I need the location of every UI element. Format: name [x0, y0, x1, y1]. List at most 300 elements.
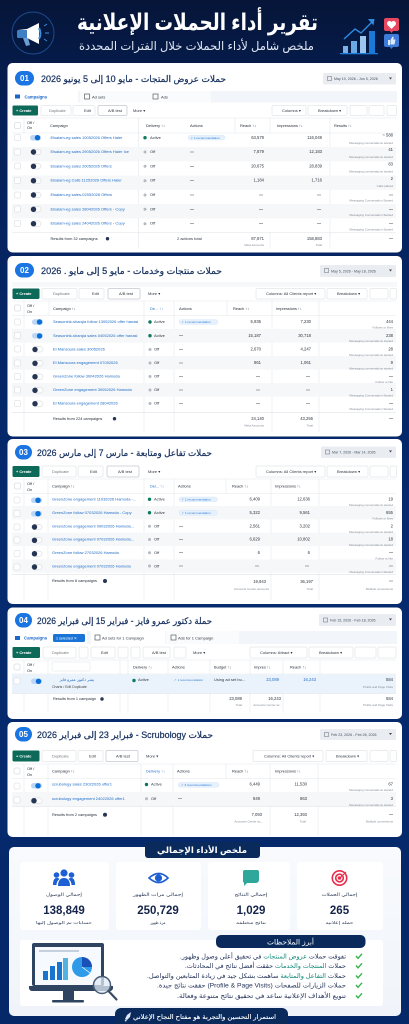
table header: Actions: [177, 768, 190, 774]
selected campaign row: 584: [386, 677, 394, 682]
date range picker: [321, 446, 396, 458]
toolbar labels: Breakdown ▾: [337, 469, 360, 474]
row 6: Messaging Conversation Started: [349, 570, 393, 574]
row 7: Messaging Conversation Started: [349, 228, 393, 232]
row 2: Elsalam-eg sales 29052026 Offers Haier Ice: [50, 149, 130, 154]
table header: Off /: [27, 303, 35, 308]
row 6: Off: [154, 387, 160, 392]
KPI card: total reach: حسابات تم الوصول إليها: [36, 920, 93, 926]
row 5: Messaging Conversation Started: [349, 198, 393, 202]
toolbar labels: More ▾: [148, 291, 160, 296]
panel: campaign 03 engagement and follow: [8, 439, 402, 604]
row 7: [14, 400, 393, 411]
totals row: Profile and Page Visits: [363, 703, 393, 707]
KPI card: total impressions: [116, 862, 201, 930]
section heading 02: حملات منتجات وخدمات - مايو 5 إلى مايو . 2026: [41, 266, 222, 277]
row 6: Messaging Conversation Started: [349, 394, 393, 398]
table header: On: [27, 309, 32, 314]
row 4: Off: [150, 178, 156, 183]
icon: megaphone: [12, 12, 54, 54]
row 7: Messaging Conversation Started: [349, 407, 393, 411]
totals row: Total: [316, 243, 322, 247]
row 4: Elsalam-eg Calls 11252026 Offers Haier: [50, 178, 122, 183]
KPI card: total reach: [20, 862, 109, 930]
totals row: Multiple conversions: [366, 820, 393, 824]
section heading 02: [15, 263, 222, 278]
totals row: Multiple conversions: [366, 587, 393, 591]
KPI card: total results: 1,029: [237, 905, 265, 917]
date range picker: May 5, 2026 - May 18, 2026: [331, 269, 376, 273]
row 5: Follow or like: [375, 556, 393, 560]
summary heading: ملخص الأداء الإجمالي: [157, 845, 247, 856]
row 1: Seasonink-sharqia follow 13052026 offer hanasi: [53, 319, 138, 324]
KPI card: total campaigns: 265: [330, 905, 350, 917]
row 3: El Mansoura sales 30052026: [53, 346, 106, 352]
row 3: Off: [150, 163, 156, 168]
row 1: 6,409: [250, 496, 261, 502]
table header: [12, 660, 396, 713]
row 2: ✓ 1 recommendation: [182, 511, 211, 515]
icon: like bubble: [384, 34, 399, 49]
tabs: Campaigns: [24, 94, 48, 100]
row 3: Messaging conversations started: [349, 353, 393, 357]
date range picker: Mar 7, 2026 - Mar 14, 2026: [332, 451, 376, 455]
row 1: 5,935: [251, 319, 262, 324]
row 1: ✓ 1 recommendation: [190, 136, 220, 140]
totals row: Meta Accounts: [244, 243, 264, 247]
row 4: 1,716: [312, 178, 323, 183]
row 7: Off: [150, 221, 156, 226]
row 6: Messaging Conversation Started: [349, 213, 393, 217]
table header: Impressions ↑↓: [277, 123, 303, 128]
row 3: [14, 346, 394, 357]
totals row: Results from 224 campaigns: [53, 416, 102, 421]
table header: Campaign ↑↓: [52, 768, 75, 774]
row 4: [14, 360, 394, 370]
row 3: 4,247: [301, 346, 312, 352]
subtitle: ملخص شامل لأداء الحملات خلال الفترات المحددة: [79, 38, 314, 54]
header banner: [12, 6, 399, 54]
row 3: [14, 162, 394, 173]
row 5: Off: [150, 192, 156, 197]
tabs: [12, 91, 397, 102]
table header: Results ↑↓: [334, 123, 352, 128]
row 4: Off: [154, 536, 160, 542]
row 2: 30,718: [298, 333, 312, 338]
section heading 05: حملات Scrubology - فبراير 23 إلى فبراير 2026: [37, 730, 213, 741]
toolbar labels: Columns ▾: [282, 108, 301, 113]
panel: campaign 04 doctor Amr Fayez: [8, 608, 402, 719]
tabs: 1 selected ✕: [56, 636, 77, 640]
toolbar labels: [16, 650, 342, 655]
icon: target: [332, 871, 347, 885]
row 7: El Mansoura engagement 28042026: [53, 400, 118, 406]
row 3: Messaging conversations started: [349, 530, 393, 534]
totals row: 24,140: [251, 416, 265, 421]
toolbar: [12, 106, 396, 116]
icon: eye: [149, 874, 168, 882]
panel: campaign 02 products and services: [8, 256, 402, 436]
row 4: Messaging conversations started: [349, 366, 393, 370]
section heading 04: 04: [19, 616, 28, 625]
row 2: [14, 332, 394, 343]
panel: campaign 01 offers: [8, 63, 402, 252]
row 5: 6: [308, 550, 311, 555]
row 2: 5,322: [250, 510, 261, 515]
icon: heart bubble: [384, 18, 399, 33]
row 4: 6,629: [250, 536, 261, 542]
row 5: [14, 550, 393, 560]
row 1: Messaging conversations started: [349, 788, 393, 792]
row 4: GreenZone engagement 07032026 Hamoda...: [52, 536, 134, 542]
toolbar labels: Breakdown ▾: [318, 108, 341, 113]
selected campaign row: يشر دكتور عمرو فايز: [59, 677, 94, 682]
tabs: [12, 631, 397, 644]
row 3: [14, 523, 394, 534]
selected campaign row: Active: [138, 677, 150, 682]
row 4: 861: [254, 360, 262, 365]
row 2: GreenZone follow 07032026 Hamoda - Copy: [52, 510, 132, 515]
toolbar labels: + Create: [16, 469, 32, 474]
row 3: Elsalam-eg sales 20052026 Offers: [50, 163, 112, 168]
toolbar labels: + Create: [16, 291, 32, 296]
table header: On: [27, 668, 32, 673]
table header: Off /: [27, 481, 35, 486]
row 1: 67: [388, 782, 394, 786]
table header: Actions: [178, 484, 191, 488]
section heading 02: 02: [20, 266, 29, 275]
row 3: 2: [391, 523, 394, 528]
table header: Actions: [179, 306, 192, 311]
row 5: Follow or like: [375, 380, 393, 384]
row 2: Follows or likes: [372, 516, 393, 520]
row 4: [14, 536, 394, 547]
observation 4: حملات الزيارات للصفحات (Profile & Page Visits) حققت نتائج جيدة.: [157, 982, 346, 990]
tabs: Ads for 1 Campaign: [178, 636, 213, 640]
toolbar labels: Edit: [101, 650, 109, 655]
row 3: 2,561: [250, 523, 261, 528]
totals row: 43,256: [300, 416, 314, 421]
selected campaign row: 16,243: [303, 677, 317, 682]
totals row: [12, 694, 396, 707]
panel: campaign 05 Scrubology: [8, 722, 402, 837]
toolbar labels: Columns: All Clients report ▾: [264, 754, 314, 758]
row 4: 1,184: [254, 178, 265, 183]
KPI card: total results: نتائج مختلفة: [236, 920, 266, 925]
section heading 05: 05: [19, 730, 28, 739]
row 1: 6,449: [250, 782, 261, 786]
footer banner: استمرار التحسين والتجربة هو مفتاح النجاح الإعلاني: [133, 1014, 276, 1021]
toolbar labels: More ▾: [193, 650, 205, 655]
row 3: GreenZone engagement 09032026 Hamoda...: [52, 523, 134, 528]
row 3: 83: [388, 162, 394, 166]
toolbar labels: Columns: All Clients report ▾: [266, 291, 316, 296]
row 2: 7,879: [254, 149, 265, 154]
footer banner: [115, 1008, 288, 1024]
KPI card: total reach: إجمالي الوصول: [46, 892, 83, 898]
section heading 01: 01: [20, 74, 29, 83]
row 5: [14, 192, 393, 202]
totals row: Results from 1 campaign: [53, 696, 96, 701]
date range picker: [320, 265, 396, 277]
table header: [12, 764, 396, 836]
selected campaign row: Using ad set bu...: [214, 677, 245, 682]
row 2: 849: [253, 796, 261, 801]
totals row: Total: [300, 820, 306, 824]
row 2: 655: [386, 510, 394, 515]
toolbar labels: [16, 754, 359, 758]
table header: Actions: [172, 664, 185, 669]
row 1: Follows or likes: [372, 326, 393, 330]
row 5: GreenZone follow 30042026 Hamoda: [53, 374, 120, 378]
totals row: [12, 412, 396, 428]
totals row: 584: [386, 696, 394, 701]
toolbar: [12, 466, 396, 477]
selected campaign row: Profile and Page Visits: [363, 685, 393, 689]
row 3: 28,839: [309, 163, 323, 168]
totals row: 16,243: [268, 696, 282, 701]
table header: Delivery ↑↓: [146, 768, 165, 774]
KPI card: total impressions: مرة ظهور: [150, 920, 166, 925]
totals row: Accounts Center accounts: [234, 587, 269, 591]
row 6: 1: [391, 387, 394, 392]
table header: Campaign ↑↓: [53, 306, 76, 311]
totals row: Accounts Center ac...: [253, 703, 282, 707]
row 1: Active: [154, 319, 166, 324]
toolbar labels: [16, 108, 341, 113]
KPI card: total results: إجمالي النتائج: [234, 892, 268, 898]
section heading 04: حملة دكتور عمرو فايز - فبراير 15 إلى فبراير 2026: [37, 616, 212, 627]
row 2: [14, 147, 394, 159]
row 3: Off: [154, 346, 160, 352]
KPI card: total results: [208, 862, 290, 930]
toolbar: [12, 288, 396, 299]
totals row: 87,671: [251, 236, 265, 241]
totals row: Total: [236, 703, 242, 707]
row 1: 7,230: [301, 319, 312, 324]
row 4: 10,802: [297, 536, 311, 542]
row 1: Messaging conversations started: [349, 503, 393, 507]
totals row: Results from 2 campaigns: [52, 812, 97, 817]
row 6: [14, 206, 393, 217]
totals row: [12, 806, 396, 824]
toolbar labels: Columns: All Clients report ▾: [266, 469, 316, 474]
icon: rocket: [124, 1012, 131, 1022]
date range picker: May 10, 2026 - Jun 5, 2026: [334, 77, 378, 81]
toolbar labels: Breakdown ▾: [336, 754, 359, 758]
row 4: Calls placed: [377, 184, 393, 188]
row 1: [14, 496, 394, 507]
totals row: [12, 575, 396, 591]
row 1: GreenZone engagement 11032026 Hamoda -...: [52, 496, 136, 502]
observation 5: تنويع الأهداف الإعلانية ساعد في تحقيق نتائج متنوعة وفعالة.: [177, 991, 346, 1000]
row 6: Off: [154, 563, 160, 568]
totals row: Accounts Center ac...: [234, 820, 263, 824]
toolbar labels: Columns: Attract ▾: [260, 650, 292, 655]
row 1: 116,049: [307, 135, 323, 140]
toolbar labels: Duplicate: [49, 108, 66, 113]
selected campaign row: [12, 674, 396, 694]
toolbar labels: + Create: [16, 108, 32, 113]
toolbar labels: A/B test: [118, 469, 133, 474]
section heading 01: [15, 71, 226, 86]
row 2: 15,187: [248, 333, 262, 338]
KPI card: total reach: 138,849: [43, 905, 85, 917]
table header: Impressions ↑↓: [275, 484, 301, 488]
row 2: [14, 510, 394, 520]
row 5: Off: [154, 550, 160, 555]
KPI card: total campaigns: [297, 862, 383, 930]
table header: Reach ↑↓: [232, 768, 248, 774]
row 5: Elsalam-eg sales-02052026 Offers: [50, 192, 112, 197]
row 6: Elsalam-eg sales 28042026 Offers - Copy: [50, 206, 125, 211]
row 1: 12,636: [297, 496, 311, 502]
KPI card: total campaigns: حملة إعلانية: [326, 920, 354, 926]
totals row: Results from 32 campaigns: [50, 236, 98, 241]
observations heading: [216, 935, 366, 948]
row 2: [14, 796, 394, 807]
row 3: 3,202: [300, 523, 311, 528]
toolbar labels: [16, 291, 360, 296]
row 4: Messaging conversations started: [349, 543, 393, 547]
row 1: Active: [151, 782, 163, 786]
row 1: 19: [388, 496, 394, 502]
row 6: [14, 387, 394, 398]
toolbar labels: A/B test: [152, 650, 167, 655]
observations heading: أبرز الملاحظات: [267, 938, 314, 946]
totals row: Results from 6 campaigns: [52, 578, 97, 583]
row 3: 28: [388, 346, 394, 352]
row 5: 6: [258, 550, 261, 555]
table header: Off /: [27, 120, 35, 125]
toolbar labels: Edit: [92, 291, 100, 296]
key observations card: [20, 935, 383, 1006]
row 1: [14, 132, 394, 145]
totals row: 23,089: [229, 696, 243, 701]
table header: On: [27, 487, 32, 492]
icon: growth bar chart: [340, 19, 378, 54]
row 4: 18: [388, 536, 394, 542]
row 5: [14, 374, 393, 384]
date range picker: [320, 729, 396, 740]
totals row: 19,943: [253, 579, 267, 584]
table header: Reach ↑↓: [232, 484, 248, 488]
row 1: [14, 319, 394, 330]
toolbar labels: A/B test: [116, 754, 131, 758]
selected campaign row: Charts / Edit Duplicate: [52, 685, 87, 689]
toolbar labels: Duplicate: [52, 650, 69, 655]
section heading 04: [15, 613, 212, 628]
table header: Delivery ↑↓: [146, 123, 165, 128]
table header: Delivery ↑↓: [133, 664, 152, 669]
row 2: 41: [388, 147, 394, 152]
row 6: GreenZone engagement 07032026 Hamoda: [52, 563, 132, 568]
toolbar labels: + Create: [16, 650, 32, 655]
row 1: 11,530: [294, 782, 308, 786]
totals row: [12, 232, 396, 248]
observation 3: حملات التفاعل والمتابعة ساهمت بشكل جيد في زيادة المتابعين والتواصل.: [147, 973, 346, 980]
row 6: Off: [150, 206, 156, 211]
row 6: GreenZone engagement 30052026 Hamoda: [53, 387, 132, 392]
toolbar labels: More ▾: [133, 108, 145, 113]
KPI card: total impressions: إجمالي مرات الظهور: [132, 892, 184, 898]
table header: Reach ↑↓: [233, 306, 249, 311]
icon: people: [53, 869, 75, 886]
row 1: 444: [386, 319, 394, 324]
row 3: Off: [154, 523, 160, 528]
toolbar labels: A/B test: [119, 291, 134, 296]
row 2: Messaging conversations started: [349, 803, 393, 807]
selected campaign row: 23,089: [266, 677, 280, 682]
totals row: Meta Accounts: [244, 424, 264, 428]
row 4: 9: [391, 360, 394, 365]
row 1: [14, 782, 394, 792]
toolbar labels: [16, 469, 360, 474]
row 3: 20,675: [251, 163, 265, 168]
row 1: Elsalam-eg sales 10052026 Offers Haier: [50, 135, 123, 140]
selected campaign row: ✓ 1 recommendation: [174, 678, 203, 682]
row 2: 863: [300, 796, 308, 801]
title: تقرير أداء الحملات الإعلانية: [77, 6, 318, 36]
table header: Impressions ↑↓: [276, 306, 302, 311]
table header: Campaign ↑↓: [52, 484, 75, 488]
tabs: Ad sets: [92, 94, 105, 100]
toolbar: [12, 750, 396, 762]
row 1: Active: [150, 135, 162, 140]
observation 5: [177, 991, 362, 1000]
row 7: Elsalam-eg sales 24042026 Offers - Copy: [50, 221, 125, 226]
table header: Campaign: [50, 123, 68, 128]
toolbar labels: Edit: [90, 469, 98, 474]
totals row: Total: [307, 587, 313, 591]
row 2: Messaging conversations started: [349, 155, 393, 159]
table header: Impres ↑↓: [254, 664, 271, 669]
table header: Actions: [190, 123, 203, 128]
totals row: 158,883: [307, 236, 323, 241]
date range picker: Feb 23, 2026 - Feb 26, 2026: [331, 733, 377, 737]
row 7: Off: [154, 400, 160, 406]
row 2: 9,561: [300, 510, 311, 515]
totals row: 2 actions total: [177, 236, 202, 241]
row 3: Messaging conversations started: [349, 169, 393, 173]
table header: Reach ↑↓: [240, 123, 256, 128]
row 5: GreenZone follow 27032026 Hamoda: [52, 550, 119, 555]
toolbar labels: Edit: [84, 108, 92, 113]
toolbar labels: A/B test: [108, 108, 123, 113]
row 1: 63,579: [251, 135, 265, 140]
row 2: Active: [154, 510, 166, 515]
row 1: ✓ 3 recommendations: [181, 783, 212, 787]
table header: [12, 479, 396, 600]
totals row: 7,093: [252, 812, 263, 817]
row 2: Off: [151, 796, 157, 801]
row 6: [14, 563, 393, 574]
table header: [12, 301, 396, 432]
row 5: Off: [154, 374, 160, 378]
toolbar labels: More ▾: [146, 754, 158, 758]
date range picker: Feb 15, 2026 - Feb 18, 2026: [330, 618, 376, 622]
summary heading: [145, 842, 260, 858]
totals row: Total: [307, 424, 313, 428]
row 4: [14, 176, 394, 188]
panel: overall performance summary: [9, 842, 401, 1016]
row 1: scrubology sales 23022026 offer1: [52, 782, 113, 786]
row 4: El Mansoura engagement 07052026: [53, 360, 118, 365]
table header: Reach ↑↓: [290, 664, 306, 669]
KPI card: total impressions: 250,729: [137, 905, 179, 917]
section heading 05: [15, 727, 213, 742]
tabs: Ad sets for 1 Campaign: [102, 636, 144, 640]
